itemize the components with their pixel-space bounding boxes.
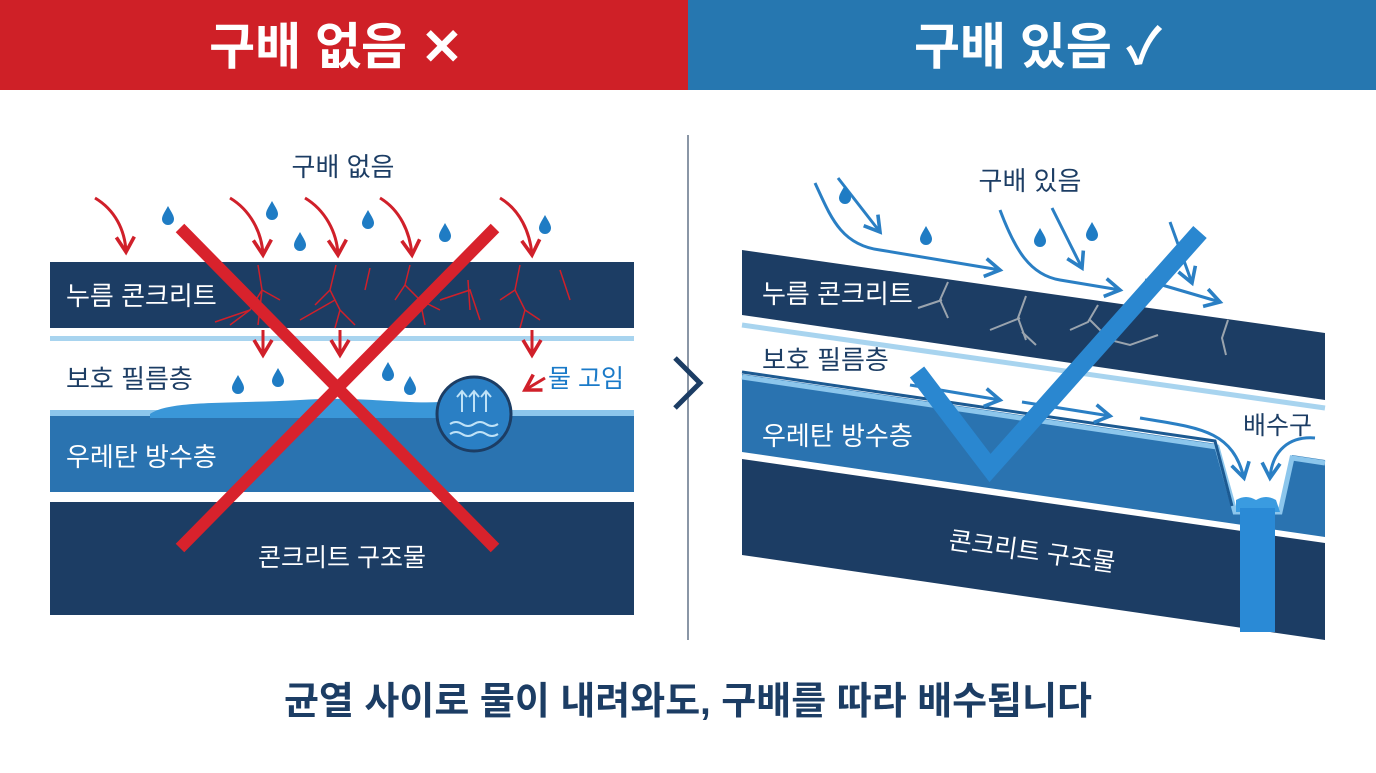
layer: urethane sloped with drain [742,372,1325,537]
panel: with slope diagram [742,166,1325,640]
layer: concrete structure: 콘크리트 구조물 [258,544,426,572]
label: slope none: 구배 없음 [292,152,394,182]
label: protective film: 보호 필름층 [762,345,889,375]
layer: pressing concrete sloped: 누름 콘크리트 [762,279,913,309]
header: no slope [0,0,688,90]
panel: no slope diagram [50,152,634,615]
layer: urethane waterproof: 우레탄 방수층 [66,442,217,472]
label: drain: 배수구 [1243,412,1312,440]
red cracks [215,265,570,328]
label: water pooling: 물 고임 [548,365,624,393]
header: no slope: 구배 없음 ✕ [209,19,463,75]
layer: pressing concrete sloped [742,250,1325,400]
layer: concrete structure [50,502,634,615]
icon: big blue check [917,232,1200,468]
water drops [839,185,1098,247]
layer: pressing concrete [50,262,634,328]
pooled water [150,399,440,418]
drain pipe [1236,497,1280,632]
water drops [162,201,551,395]
icon: water pooling circle [437,377,511,451]
icon: chevron arrow [675,358,700,408]
label: protective film: 보호 필름층 [66,364,193,394]
icon: big red X [180,228,495,548]
header: with slope [688,0,1376,90]
layer: pressing concrete: 누름 콘크리트 [66,281,217,311]
red arrows rain [95,198,545,390]
layer: urethane sloped with drain: 우레탄 방수층 [762,421,913,451]
layer: urethane waterproof [50,410,634,492]
label: slope: 구배 있음 [979,166,1081,196]
layer: concrete structure sloped: 콘크리트 구조물 [947,526,1117,578]
layer: concrete structure sloped [742,459,1325,640]
caption: 균열 사이로 물이 내려와도, 구배를 따라 배수됩니다 [284,681,1092,723]
grey cracks [918,282,1228,355]
header: with slope: 구배 있음 ✓ [914,19,1163,75]
blue flow arrows [815,178,1315,478]
